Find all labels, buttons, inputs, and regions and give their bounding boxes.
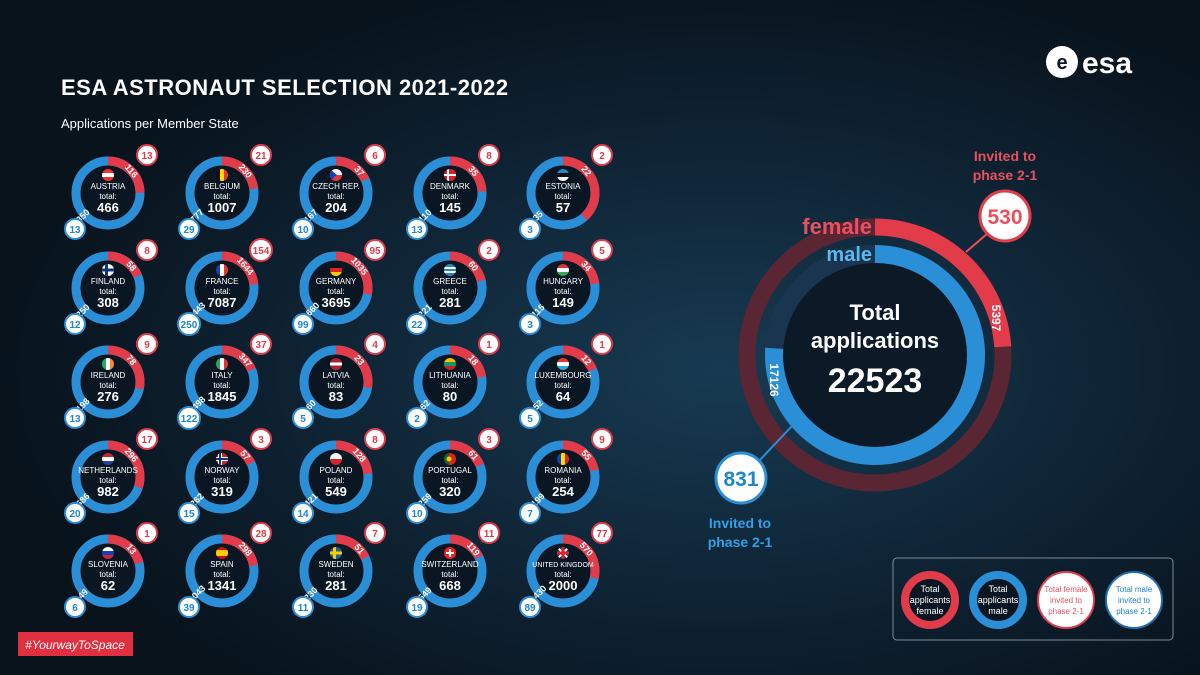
donut: Netherlands: NETHERLANDS [78, 466, 138, 475]
donut: Poland: total: [327, 476, 345, 485]
donut: Denmark: DENMARK [430, 182, 471, 191]
donut: Sweden: 230 [302, 585, 320, 603]
donut: Switzerland: 119 [465, 540, 482, 558]
donut: Slovenia: 1 [144, 529, 150, 540]
donut: Greece: 281 [439, 295, 461, 310]
donut: Estonia: ESTONIA [546, 182, 581, 191]
donut: Italy: 37 [255, 340, 267, 351]
donut: Luxembourg: total: [554, 381, 572, 390]
legend: invited to [1050, 596, 1083, 605]
donut: Poland: POLAND [320, 466, 353, 475]
logo: esa [1046, 46, 1132, 80]
donut: Denmark: 13 [411, 225, 423, 236]
donut: Switzerland: total: [441, 570, 459, 579]
donut: Austria: 116 [123, 162, 140, 180]
donut: Sweden: total: [327, 570, 345, 579]
callout: male invited: 831 [723, 468, 759, 491]
donut: Slovenia: SLOVENIA [88, 560, 129, 569]
donut: Portugal [407, 429, 499, 523]
donut: Finland: 58 [124, 259, 138, 273]
donut: Luxembourg [520, 334, 612, 428]
donut: Ireland: 276 [97, 389, 119, 404]
donut: Finland: FINLAND [91, 277, 125, 286]
donut: Spain: 1043 [186, 583, 207, 604]
legend: Total male [1116, 585, 1153, 594]
donut: Belgium: total: [213, 192, 231, 201]
donut: Germany: 3695 [322, 295, 350, 310]
donut: France: 7087 [208, 295, 236, 310]
donut: Netherlands: 20 [69, 509, 81, 520]
donut: Romania: 55 [579, 448, 593, 462]
legend: Total [988, 584, 1008, 594]
donut: Greece: 221 [416, 302, 434, 320]
legend: invited to [1118, 596, 1151, 605]
donut: Italy [178, 334, 271, 429]
donut: Netherlands: 686 [74, 491, 92, 509]
donut: Luxembourg: 12 [579, 353, 593, 367]
donut: Portugal: 3 [486, 435, 492, 446]
donut: Ireland: 13 [69, 414, 81, 425]
donut: Latvia: 60 [304, 398, 318, 412]
donut: Belgium: 29 [183, 225, 195, 236]
donut: France: total: [213, 287, 231, 296]
callout: female invited: Invited to [974, 148, 1036, 164]
legend: Total [920, 584, 940, 594]
donut: United Kingdom: 570 [578, 540, 595, 558]
donut: Czech Rep.: 167 [302, 207, 320, 225]
donut: Portugal: 10 [411, 509, 423, 520]
donut: United Kingdom: 77 [596, 529, 608, 540]
donut: Hungary: 115 [529, 302, 547, 320]
donut: Switzerland: SWITZERLAND [421, 560, 479, 569]
donut: Norway: 3 [258, 435, 264, 446]
donut: Germany: 2660 [300, 300, 321, 321]
donut: Austria: AUSTRIA [91, 182, 126, 191]
donut: Belgium [179, 145, 271, 239]
donut: France: FRANCE [206, 277, 238, 286]
donut: Italy: 122 [181, 414, 198, 425]
donut: Poland: 421 [302, 491, 320, 509]
donut: Greece: total: [441, 287, 459, 296]
donut: United Kingdom: 1430 [527, 583, 548, 604]
panel: country donuts [65, 145, 612, 617]
donut: Estonia: 2 [599, 151, 605, 162]
donut: Italy: 1498 [186, 394, 207, 415]
donut: Poland: 549 [325, 484, 347, 499]
donut: Austria: 13 [69, 225, 81, 236]
donut: Romania: 9 [599, 435, 605, 446]
donut: Estonia: total: [554, 192, 572, 201]
donut: Romania: 254 [552, 484, 575, 499]
donut: Denmark: 35 [466, 164, 480, 178]
donut: Latvia: total: [327, 381, 345, 390]
donut: Belgium: BELGIUM [204, 182, 240, 191]
donut: Germany [293, 240, 385, 334]
donut: Norway [179, 429, 271, 523]
title: ESA ASTRONAUT SELECTION 2021-2022 [61, 75, 509, 100]
donut: Finland: total: [99, 287, 117, 296]
donut: Germany: GERMANY [316, 277, 357, 286]
donut: Czech Rep.: total: [327, 192, 345, 201]
donut: Latvia: 4 [372, 340, 378, 351]
chart: total applications rings: applications [811, 328, 939, 353]
donut: Denmark: total: [441, 192, 459, 201]
donut: Lithuania: 80 [443, 389, 457, 404]
donut: Poland: 14 [297, 509, 309, 520]
donut: Greece: GREECE [433, 277, 467, 286]
donut: Latvia: LATVIA [323, 371, 350, 380]
chart: total applications rings: Total [850, 300, 900, 325]
donut: Greece: 22 [411, 320, 423, 331]
donut: Spain: 39 [183, 603, 195, 614]
donut: Hungary: 5 [599, 246, 605, 257]
donut: Hungary: HUNGARY [543, 277, 584, 286]
donut: Czech Rep.: 37 [352, 164, 366, 178]
donut: Netherlands: 982 [97, 484, 119, 499]
donut: United Kingdom [520, 523, 612, 617]
callout: male invited: Invited to [709, 515, 771, 531]
donut: Lithuania: 18 [466, 353, 480, 367]
donut: Spain: 28 [255, 529, 267, 540]
donut: Romania: 199 [529, 491, 547, 509]
donut: Slovenia: 6 [72, 603, 78, 614]
donut: Lithuania: 1 [486, 340, 492, 351]
donut: United Kingdom: 89 [524, 603, 536, 614]
donut: Austria: 13 [141, 151, 153, 162]
donut: Ireland: 198 [74, 396, 92, 414]
donut: Romania: total: [554, 476, 572, 485]
legend: male [988, 606, 1008, 616]
donut: Lithuania: total: [441, 381, 459, 390]
donut: Hungary: 34 [579, 259, 593, 273]
donut: Portugal: PORTUGAL [428, 466, 472, 475]
donut: Czech Rep. [293, 145, 385, 239]
donut: Netherlands: 17 [141, 435, 153, 446]
legend: Total female [1044, 585, 1088, 594]
callout: male invited [708, 426, 792, 550]
donut: Portugal: total: [441, 476, 459, 485]
donut: Belgium: 1007 [208, 200, 236, 215]
donut: Austria: 350 [74, 207, 92, 225]
donut: Luxembourg: 52 [531, 398, 545, 412]
chart: total applications rings: 17126 [767, 363, 781, 397]
donut: Poland [293, 429, 385, 523]
donut: Norway: 319 [211, 484, 233, 499]
chart: total applications rings: male [826, 244, 872, 266]
donut: Luxembourg: 5 [527, 414, 533, 425]
donut: Spain: 298 [237, 540, 254, 558]
donut: Slovenia: 62 [101, 578, 115, 593]
donut: Netherlands [65, 429, 157, 523]
callout: male invited: phase 2-1 [708, 534, 773, 550]
donut: Finland: 12 [69, 320, 81, 331]
donut: Slovenia: total: [99, 570, 117, 579]
donut: Sweden: SWEDEN [318, 560, 354, 569]
donut: Hungary: 149 [552, 295, 574, 310]
donut: Belgium: 230 [237, 162, 254, 180]
donut: Italy: 1845 [208, 389, 236, 404]
donut: Ireland: 9 [144, 340, 150, 351]
donut: Czech Rep.: CZECH REP. [312, 182, 360, 191]
donut: Portugal: 61 [466, 448, 480, 462]
donut: Portugal: 320 [439, 484, 461, 499]
donut: Romania [520, 429, 612, 523]
donut: Latvia [293, 334, 385, 428]
chart: total applications rings: 22523 [828, 362, 922, 400]
donut: Greece [407, 240, 499, 334]
callout: female invited [966, 148, 1038, 252]
legend: applicants [978, 595, 1019, 605]
donut: Switzerland: 668 [439, 578, 461, 593]
donut: Switzerland [407, 523, 499, 617]
donut: Luxembourg: 1 [599, 340, 605, 351]
donut: Netherlands: 296 [123, 446, 140, 464]
donut: United Kingdom: UNITED KINGDOM [532, 562, 594, 569]
donut: Norway: NORWAY [205, 466, 240, 475]
donut: Hungary [520, 240, 612, 334]
donut: Estonia: 35 [531, 209, 545, 223]
donut: Finland: 8 [144, 246, 150, 257]
donut: Germany: 1035 [349, 255, 370, 277]
donut: Sweden: 7 [372, 529, 378, 540]
donut: Romania: ROMANIA [544, 466, 582, 475]
donut: Greece: 60 [466, 259, 480, 273]
donut: Latvia: 5 [300, 414, 306, 425]
legend: female [916, 606, 944, 616]
chart: total applications rings [747, 214, 1003, 483]
donut: Finland [65, 240, 157, 334]
donut: Norway: 57 [238, 448, 252, 462]
donut: Belgium: 777 [188, 207, 206, 225]
donut: France: 250 [181, 320, 198, 331]
donut: Italy: total: [213, 381, 231, 390]
callout: female invited: 530 [987, 206, 1023, 229]
donut: United Kingdom: total: [554, 570, 572, 579]
donut: Switzerland: 11 [484, 529, 495, 540]
donut: Sweden: 51 [352, 542, 366, 556]
callout: female invited: phase 2-1 [973, 167, 1038, 183]
donut: France [178, 239, 272, 335]
logo: esa: esa [1082, 47, 1132, 80]
donut: Italy: ITALY [211, 371, 233, 380]
chart: total applications rings: female [802, 214, 872, 239]
donut: Norway: total: [213, 476, 231, 485]
hashtag: #YourwayToSpace [25, 638, 125, 652]
donut: Denmark [407, 145, 499, 239]
logo: esa: e [1056, 52, 1068, 74]
donut: Poland: 8 [372, 435, 378, 446]
donut: France: 1644 [235, 255, 256, 277]
donut: Switzerland: 549 [416, 585, 434, 603]
donut: Finland: 308 [97, 295, 119, 310]
donut: Spain: 1341 [208, 578, 236, 593]
donut: Lithuania: 2 [414, 414, 420, 425]
legend: applicants [910, 595, 951, 605]
donut: Luxembourg: LUXEMBOURG [535, 371, 591, 380]
donut: Portugal: 259 [416, 491, 434, 509]
donut: Estonia [520, 145, 612, 239]
donut: Slovenia: 49 [76, 587, 90, 601]
donut: France: 154 [253, 246, 270, 257]
donut: Czech Rep.: 6 [372, 151, 378, 162]
donut: Norway: 15 [183, 509, 195, 520]
donut: Greece: 2 [486, 246, 492, 257]
donut: Lithuania [407, 334, 499, 428]
donut: Germany: 99 [297, 320, 309, 331]
donut: United Kingdom: 2000 [549, 578, 577, 593]
donut: Belgium: 21 [255, 151, 267, 162]
donut: Luxembourg: 64 [556, 389, 571, 404]
donut: Spain: total: [213, 570, 231, 579]
donut: Netherlands: total: [99, 476, 117, 485]
donut: Denmark: 8 [486, 151, 492, 162]
donut: Austria: total: [99, 192, 117, 201]
donut: Spain: SPAIN [210, 560, 234, 569]
donut: Hungary: 3 [527, 320, 533, 331]
donut: Poland: 128 [351, 446, 368, 464]
donut: Germany: 95 [369, 246, 381, 257]
chart: total applications rings: 5397 [989, 305, 1003, 332]
donut: France: 5443 [186, 300, 207, 321]
donut: Latvia: 23 [352, 353, 366, 367]
donut: Norway: 262 [188, 491, 206, 509]
donut: Ireland: total: [99, 381, 117, 390]
donut: Estonia: 22 [579, 164, 593, 178]
donut: Latvia: 83 [329, 389, 343, 404]
donut: Denmark: 145 [439, 200, 461, 215]
donut: Czech Rep.: 10 [297, 225, 309, 236]
donut: Germany: total: [327, 287, 345, 296]
donut: Sweden: 11 [298, 603, 309, 614]
donut: Sweden [293, 523, 385, 617]
donut: Sweden: 281 [325, 578, 347, 593]
donut: Spain [179, 523, 271, 617]
donut: Hungary: total: [554, 287, 572, 296]
donut: Austria [65, 145, 157, 239]
donut: Italy: 347 [237, 351, 254, 369]
donut: Denmark: 110 [416, 207, 434, 225]
donut: Switzerland: 19 [411, 603, 423, 614]
donut: Slovenia [65, 523, 157, 617]
legend: phase 2-1 [1048, 607, 1084, 616]
donut: Ireland: 78 [124, 353, 138, 367]
donut: Romania: 7 [527, 509, 533, 520]
donut: Estonia: 57 [556, 200, 570, 215]
subtitle: Applications per Member State [61, 116, 239, 131]
donut: Lithuania: LITHUANIA [429, 371, 472, 380]
donut: Finland: 250 [74, 302, 92, 320]
legend: phase 2-1 [1116, 607, 1152, 616]
donut: Ireland [65, 334, 157, 428]
donut: Ireland: IRELAND [91, 371, 126, 380]
donut: Lithuania: 62 [418, 398, 432, 412]
legend [893, 558, 1173, 640]
donut: Czech Rep.: 204 [325, 200, 348, 215]
hashtag [18, 632, 133, 656]
donut: Slovenia: 13 [124, 542, 138, 556]
donut: Estonia: 3 [527, 225, 533, 236]
donut: Austria: 466 [97, 200, 119, 215]
